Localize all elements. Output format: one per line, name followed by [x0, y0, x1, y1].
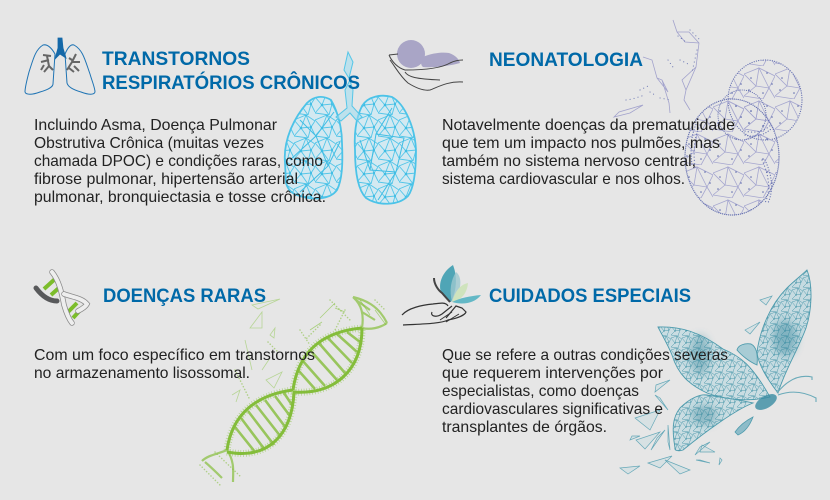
text: rare diseases description: Com um foco específico em transtornos: [34, 347, 315, 364]
text: respiratory description: [34, 117, 326, 206]
text: rare diseases description: no armazenamento lisossomal.: [34, 365, 250, 382]
text: respiratory description: pulmonar, bronquiectasia e tosse crônica.: [34, 189, 326, 206]
text: neonatology description: Notavelmente doenças da prematuridade: [442, 117, 735, 134]
text: special care description: cardiovasculares significativas e: [442, 401, 663, 418]
icon: lungs: [25, 38, 95, 94]
heading: respiratory: RESPIRATÓRIOS CRÔNICOS: [102, 70, 360, 94]
image: mesh lungs: [285, 52, 416, 204]
text: rare diseases description: [34, 347, 315, 382]
image: green DNA helix: [200, 297, 387, 485]
text: special care description: que requerem intervenções por: [442, 365, 664, 382]
text: respiratory description: fibrose pulmonar, hipertensão arterial: [34, 171, 298, 188]
heading: respiratory: TRANSTORNOS: [102, 48, 250, 70]
heading: respiratory: [102, 48, 360, 94]
text: respiratory description: Incluindo Asma, Doença Pulmonar: [34, 117, 278, 134]
text: neonatology description: que tem um impacto nos pulmões, mas: [442, 135, 720, 152]
icon: DNA: [36, 272, 87, 323]
heading: rare diseases: DOENÇAS RARAS: [103, 285, 266, 307]
image: neonatal point network: [614, 20, 802, 215]
text: neonatology description: sistema cardiovascular e nos olhos.: [442, 171, 685, 188]
heading: special care: CUIDADOS ESPECIAIS: [489, 285, 691, 307]
image: teal mesh butterfly: [620, 270, 816, 474]
icon: butterfly on hand: [402, 265, 481, 325]
icon: baby on hand: [389, 40, 463, 90]
heading: neonatology: NEONATOLOGIA: [489, 49, 643, 71]
text: special care description: especialistas, como doenças: [442, 383, 639, 400]
text: neonatology description: também no sistema nervoso central,: [442, 153, 696, 170]
text: special care description: transplantes de órgãos.: [442, 419, 607, 436]
text: respiratory description: chamada DPOC) e condições raras, como: [34, 153, 323, 170]
text: respiratory description: Obstrutiva Crônica (muitas vezes: [34, 135, 264, 152]
text: special care description: [442, 347, 728, 436]
text: special care description: Que se refere a outras condições severas: [442, 347, 728, 364]
text: neonatology description: [442, 117, 735, 188]
